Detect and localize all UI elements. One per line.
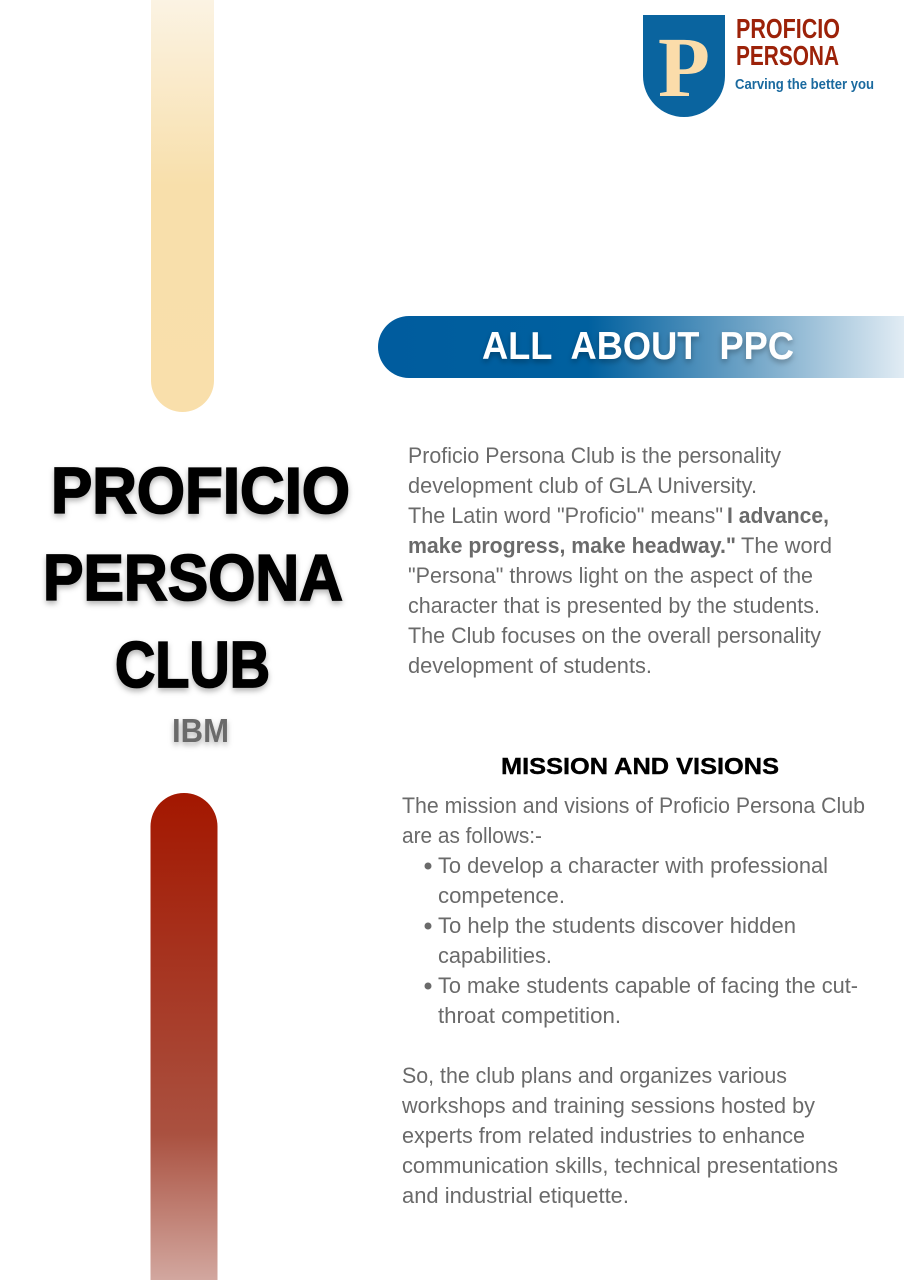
text block: mission intro: are as follows:-: [402, 823, 542, 848]
text block: mission intro: [402, 793, 865, 848]
bullet list: mission points: [424, 853, 858, 1028]
text block: about the club: The word: [741, 533, 832, 558]
logo wordmark: PERSONA: [736, 40, 839, 71]
bullet list: mission points: To make students capable of facing the cut-: [438, 973, 858, 998]
subtitle: IBM: IBM: [172, 712, 229, 749]
title: Proficio Persona Club: PROFICIO: [51, 455, 350, 527]
text block: about the club: "Persona" throws light on the aspect of the: [408, 563, 813, 588]
bullet list: mission points: capabilities.: [438, 943, 552, 968]
text block: closing paragraph: [401, 1063, 838, 1208]
bullet list: mission points: To develop a character with professional: [438, 853, 828, 878]
decorative bar: cream top: [151, 0, 214, 412]
text block: about the club: development club of GLA University.: [408, 473, 757, 498]
title: Proficio Persona Club: CLUB: [115, 629, 270, 701]
logo wordmark: PROFICIO: [736, 13, 840, 44]
text block: closing paragraph: So, the club plans and organizes various: [402, 1063, 787, 1088]
banner: all about PPC: [378, 316, 904, 378]
icon: shield with P: P: [658, 19, 710, 115]
bullet list: mission points: throat competition.: [438, 1003, 621, 1028]
text block: about the club: The Club focuses on the overall personality: [408, 623, 821, 648]
text block: about the club: make progress, make headway.": [408, 533, 736, 558]
text block: closing paragraph: communication skills, technical presentations: [402, 1153, 838, 1178]
text block: about the club: I advance,: [727, 503, 829, 528]
banner: all about PPC: ALL ABOUT PPC: [482, 325, 794, 368]
title: Proficio Persona Club: PERSONA: [43, 542, 343, 614]
text block: about the club: development of students.: [408, 653, 652, 678]
text block: closing paragraph: experts from related industries to enhance: [402, 1123, 805, 1148]
title: Proficio Persona Club: [43, 455, 350, 701]
logo wordmark: [735, 13, 874, 93]
text block: closing paragraph: and industrial etiquette.: [402, 1183, 629, 1208]
text block: about the club: character that is presented by the students.: [408, 593, 820, 618]
logo: [643, 13, 874, 117]
text block: about the club: Proficio Persona Club is the personality: [408, 443, 781, 468]
bullet list: mission points: competence.: [438, 883, 565, 908]
heading: mission and visions: MISSION AND VISIONS: [501, 753, 779, 779]
logo wordmark: Carving the better you: [735, 77, 874, 93]
text block: closing paragraph: workshops and training sessions hosted by: [401, 1093, 815, 1118]
text block: about the club: [408, 443, 832, 678]
text block: mission intro: The mission and visions of Proficio Persona Club: [402, 793, 865, 818]
decorative bar: red bottom: [150, 793, 218, 1280]
bullet list: mission points: To help the students discover hidden: [438, 913, 796, 938]
icon: shield with P: [643, 15, 725, 117]
text block: about the club: The Latin word "Proficio" means": [408, 503, 723, 528]
